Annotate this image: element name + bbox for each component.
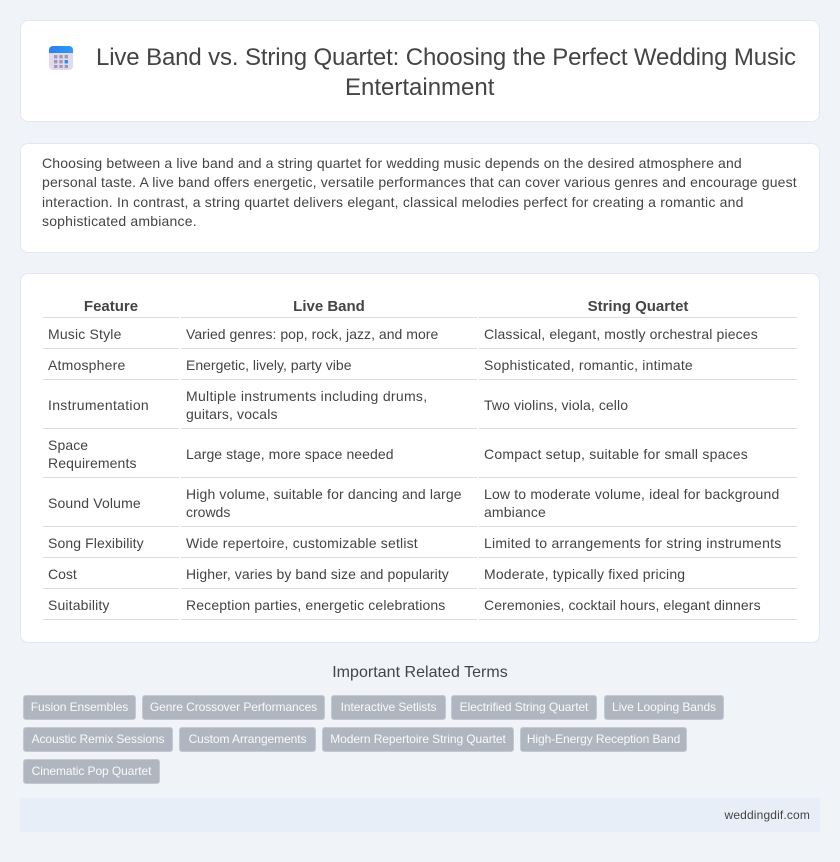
icon: calendar (49, 46, 73, 70)
related term tags: Custom Arrangements (189, 732, 306, 746)
comparison table (43, 298, 797, 620)
comparison table: Atmosphere (48, 357, 125, 373)
comparison table: ambiance (484, 504, 546, 520)
related term tags: Cinematic Pop Quartet (32, 764, 151, 778)
panel: title card (20, 20, 820, 122)
comparison table: Compact setup, suitable for small spaces (484, 446, 748, 462)
comparison table: Requirements (48, 455, 137, 471)
intro text: personal taste. A live band offers energetic, versatile performances that can cover various genres and encourage guest (42, 174, 797, 190)
related term tags: Fusion Ensembles (31, 700, 128, 714)
comparison table: Large stage, more space needed (186, 446, 394, 462)
related term tags: Electrified String Quartet (460, 700, 588, 714)
panel: comparison table card (20, 273, 820, 643)
comparison table: Song Flexibility (48, 535, 144, 551)
comparison table: High volume, suitable for dancing and large (186, 486, 462, 502)
comparison table: Ceremonies, cocktail hours, elegant dinners (484, 597, 761, 613)
comparison table: Music Style (48, 326, 122, 342)
header: Feature: Feature (84, 298, 138, 315)
comparison table: Multiple instruments including drums, (186, 388, 427, 404)
intro text: sophisticated ambiance. (42, 213, 197, 229)
comparison table: Limited to arrangements for string instruments (484, 535, 782, 551)
related term tags (23, 695, 724, 784)
comparison table: Reception parties, energetic celebrations (186, 597, 445, 613)
comparison table: Sophisticated, romantic, intimate (484, 357, 693, 373)
comparison table: Instrumentation (48, 397, 149, 413)
related term tags: Genre Crossover Performances (150, 700, 317, 714)
related term tags: Live Looping Bands (612, 700, 716, 714)
header: Live Band: Live Band (293, 298, 365, 315)
comparison table: Low to moderate volume, ideal for background (484, 486, 779, 502)
related term tags: High-Energy Reception Band (527, 732, 680, 746)
title line 2: Entertainment (345, 74, 494, 101)
comparison table: Moderate, typically fixed pricing (484, 566, 685, 582)
intro text: interaction. In contrast, a string quartet delivers elegant, classical melodies perfect for creating a romantic and (42, 194, 744, 210)
related term tags: Acoustic Remix Sessions (32, 732, 164, 746)
footer text: weddingdif.com (725, 808, 810, 822)
heading: related terms: Important Related Terms (332, 664, 508, 681)
comparison table: Varied genres: pop, rock, jazz, and more (186, 326, 438, 342)
comparison table: crowds (186, 504, 230, 520)
comparison table: Classical, elegant, mostly orchestral pieces (484, 326, 758, 342)
footer bar (20, 798, 820, 832)
header: String Quartet: String Quartet (588, 298, 688, 315)
comparison table: Higher, varies by band size and popularity (186, 566, 449, 582)
comparison table: guitars, vocals (186, 406, 278, 422)
intro text: Choosing between a live band and a string quartet for wedding music depends on the desired atmosphere and (42, 155, 742, 171)
comparison table: Energetic, lively, party vibe (186, 357, 351, 373)
intro text (42, 155, 797, 229)
related term tags: Interactive Setlists (341, 700, 436, 714)
comparison table: Two violins, viola, cello (484, 397, 628, 413)
title: Live Band vs. String Quartet: Choosing the Perfect Wedding Music (96, 44, 796, 71)
panel: introduction card (20, 143, 820, 253)
comparison table: Space (48, 437, 88, 453)
comparison table: Sound Volume (48, 495, 141, 511)
comparison table: Cost (48, 566, 77, 582)
comparison table: Suitability (48, 597, 110, 613)
related term tags: Modern Repertoire String Quartet (330, 732, 506, 746)
comparison table: Wide repertoire, customizable setlist (186, 535, 418, 551)
